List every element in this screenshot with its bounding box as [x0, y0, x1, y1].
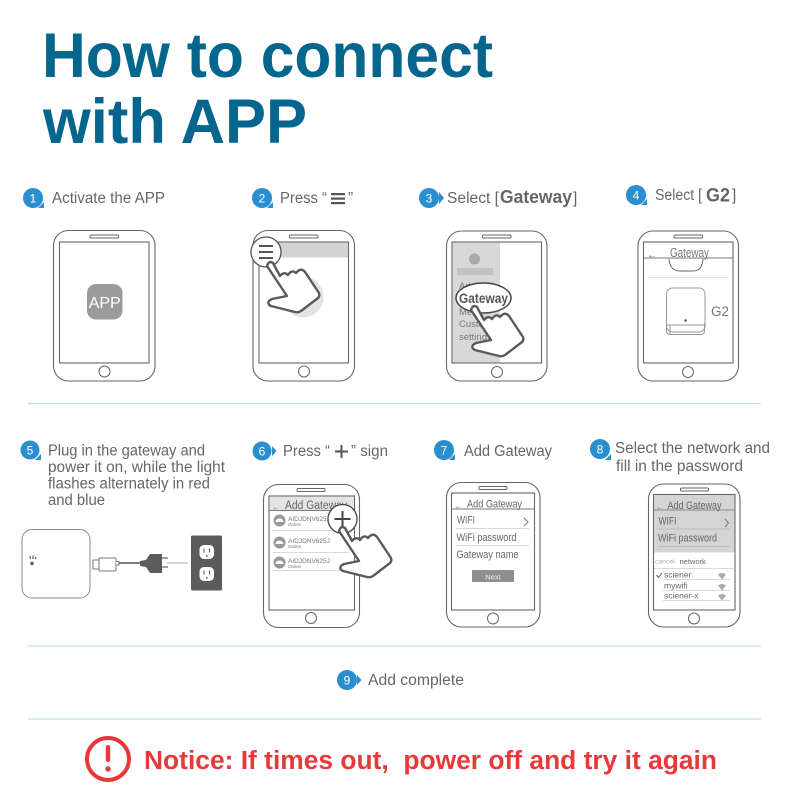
form fields: WiFi password: [456, 532, 516, 544]
wall outlet: [191, 536, 222, 590]
lock list: AIDJDNV625J: [288, 558, 330, 565]
step 3 phone: Mes: [459, 307, 477, 318]
step 1 badge: 1: [30, 192, 37, 206]
step 3 phone: setting: [459, 332, 487, 343]
step 6 label: ” sign: [351, 443, 388, 460]
step 8 phone: [648, 484, 740, 627]
network picker: sciener-x: [664, 590, 699, 600]
step 7 badge: 7: [441, 444, 448, 458]
title: [42, 21, 493, 157]
step 4 label: Select [: [655, 187, 703, 204]
step 7: [434, 440, 552, 627]
step 8 badge: 8: [597, 442, 604, 456]
step 8: [590, 439, 770, 627]
step 7 phone: ←: [454, 502, 462, 511]
step 9: [337, 670, 464, 690]
step 8 text: fill in the password: [616, 458, 743, 475]
step 5: [20, 440, 226, 598]
step 5 badge: 5: [27, 444, 34, 458]
step 3 badge: [419, 188, 444, 208]
form fields: Gateway name: [456, 549, 518, 561]
step 8 badge: [590, 439, 611, 460]
step 6 phone: Add Gateway: [285, 500, 347, 512]
step 9 badge: 9: [344, 674, 351, 688]
step 7 label: Add Gateway: [464, 443, 552, 460]
APP icon: APP: [89, 295, 121, 312]
step 4 phone: Gateway: [670, 246, 710, 260]
form fields: [456, 514, 528, 561]
form fields: WIFI: [658, 516, 676, 528]
step 6 label: [283, 443, 388, 460]
step 8 phone: ←: [656, 503, 664, 512]
network picker: sciener: [664, 570, 692, 580]
network picker: cancel: [655, 558, 675, 566]
form fields: WIFI: [457, 514, 475, 526]
APP icon: [87, 284, 122, 320]
step 2 label: ”: [348, 190, 353, 207]
next button: [472, 570, 514, 582]
lock list: [274, 514, 330, 569]
step 3 label: ]: [573, 190, 577, 207]
notice text: Notice: If times out, power off and try it again: [144, 747, 717, 775]
form fields: [658, 516, 728, 544]
step 1 badge: [23, 188, 44, 208]
step 1 label: Activate the APP: [52, 190, 165, 207]
step 7 phone: Add Gateway: [467, 498, 522, 510]
step 2 badge: 2: [259, 192, 266, 206]
step 1: [23, 188, 165, 381]
next button: Next: [485, 572, 502, 582]
lock list: AIDJDNV625J: [288, 538, 330, 545]
step 3: [419, 187, 577, 381]
title: with APP: [42, 87, 307, 157]
step 6 badge: [252, 442, 276, 460]
power cable and plug: [93, 554, 188, 573]
Gateway callout: [456, 283, 511, 313]
step 3 badge: 3: [426, 192, 433, 206]
step 2 label: Press “: [280, 190, 327, 207]
warning icon: [87, 738, 129, 780]
G2 label: G2: [711, 304, 729, 319]
step 8 text: Select the network and: [615, 440, 770, 457]
step 2 phone: [251, 230, 354, 381]
step 3 label: [447, 187, 577, 207]
lock list: Online: [288, 544, 302, 549]
step 5 text: and blue: [48, 492, 105, 509]
step 4 label: G2: [706, 186, 730, 206]
hand pointer: [471, 306, 523, 356]
step 3 phone: Add lock: [459, 281, 496, 292]
step 3 label: Gateway: [500, 187, 572, 207]
step 6: [252, 442, 391, 628]
step 3 label: Select [: [447, 190, 500, 207]
form fields: WiFi password: [658, 532, 717, 544]
step 4 phone: [638, 231, 738, 381]
G2 device: [666, 288, 705, 334]
step 4 phone: ←: [647, 250, 657, 261]
step 5 text: flashes alternately in red: [48, 476, 210, 492]
network picker: network: [680, 557, 706, 566]
Gateway callout: Gateway: [459, 291, 508, 306]
step 6 label: Press “: [283, 443, 330, 460]
step 3 phone: [446, 231, 547, 381]
step 5 text: Plug in the gateway and: [48, 442, 205, 460]
step 3 phone: Custo: [459, 319, 484, 330]
step 5 text: power it on, while the light: [48, 459, 226, 476]
lock list: Online: [288, 522, 302, 527]
step 6 badge: 6: [259, 444, 266, 458]
step 7 phone: [446, 482, 540, 627]
gateway device: [22, 530, 90, 598]
step 4 badge: 4: [633, 188, 640, 202]
step 6 phone: [264, 484, 391, 628]
menu callout: [251, 237, 281, 267]
step 8 phone: Add Gateway: [668, 500, 722, 512]
network picker: [654, 557, 735, 600]
step 6 phone: ←: [272, 503, 280, 512]
step 4 badge: [626, 185, 647, 205]
step 1 phone: [54, 230, 155, 381]
step 5 badge: [20, 440, 41, 460]
step 8 text: [615, 440, 770, 475]
step 9 label: Add complete: [368, 672, 464, 689]
lock list: Online: [288, 564, 302, 569]
step 7 badge: [434, 440, 455, 460]
title: How to connect: [42, 21, 493, 91]
network picker: mywifi: [664, 580, 688, 590]
notice: [87, 738, 717, 780]
step 2: [251, 188, 354, 381]
step 4 label: [655, 186, 736, 206]
step 4 label: ]: [732, 187, 736, 204]
hand pointer: [267, 262, 319, 312]
lock list: AIDJDNV625J: [288, 516, 330, 523]
step 2 badge: [252, 188, 273, 208]
hand pointer: [339, 527, 391, 577]
step 2 label: [280, 190, 353, 207]
plus callout: [328, 504, 357, 534]
step 5 text: [48, 442, 226, 509]
step 4: [626, 185, 738, 381]
